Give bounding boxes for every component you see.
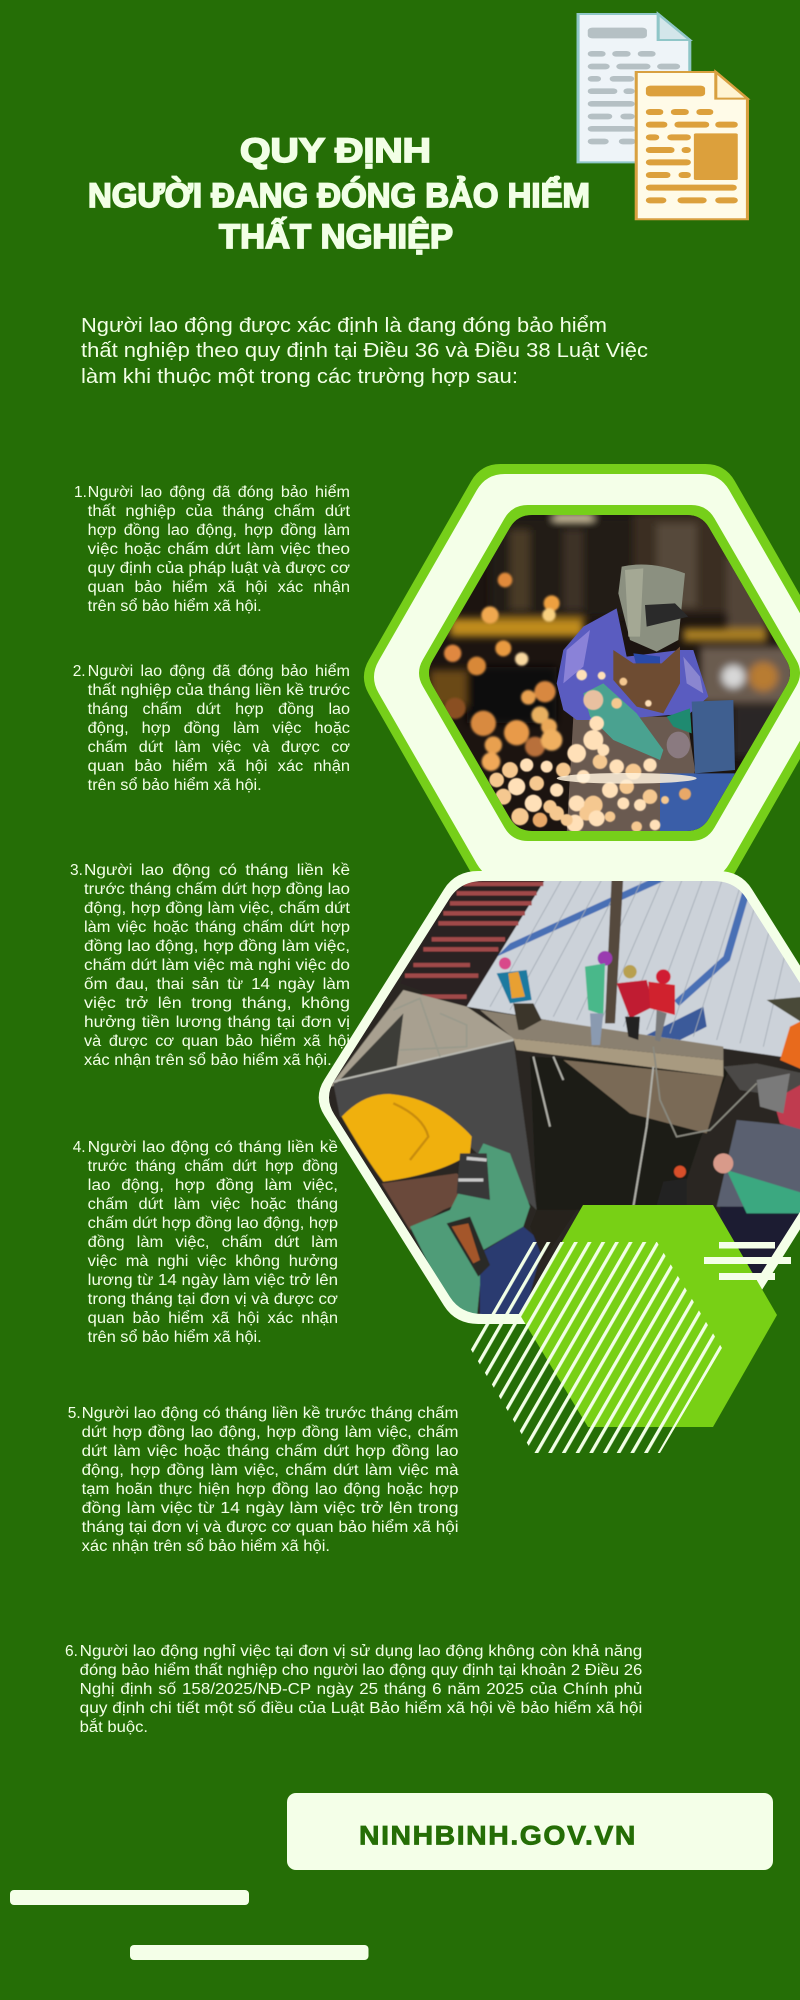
- list item 3: việc trở lên trong tháng, không: [84, 995, 350, 1012]
- intro paragraph: làm khi thuộc một trong các trường hợp sau:: [81, 365, 518, 388]
- icon: orange document: [636, 72, 747, 219]
- list item 2: Người lao động đã đóng bảo hiểm: [88, 663, 350, 680]
- title: QUY ĐỊNH: [240, 132, 431, 170]
- list item 5: động, hợp đồng làm việc, chấm dứt làm việc mà: [82, 1462, 459, 1479]
- list item 4: việc mà nghi việc không hưởng: [88, 1253, 338, 1270]
- hexagon outer lime ring: [364, 464, 800, 890]
- list item 5: tạm hoãn thực hiện hợp đồng lao động hoặc hợp: [82, 1481, 458, 1498]
- photo: welder with sparks: [417, 513, 800, 833]
- list item 1: trên sổ bảo hiểm xã hội.: [88, 598, 262, 615]
- list item 2: 2.: [73, 663, 86, 680]
- list item 5: dứt hợp đồng lao động, hợp đồng làm việc, chấm: [82, 1424, 458, 1441]
- list item 2: tháng chấm dứt hợp đồng lao: [88, 701, 350, 718]
- list item 4: Người lao động có tháng liền kề: [88, 1139, 338, 1156]
- list item 1: việc hoặc chấm dứt làm việc theo: [88, 541, 350, 558]
- list item 6: quy định chi tiết một số điều của Luật Bảo hiểm xã hội về bảo hiểm xã hội: [80, 1700, 642, 1717]
- list item 3: xác nhận trên sổ bảo hiểm xã hội.: [84, 1052, 332, 1069]
- list item 3: Người lao động có tháng liền kề: [84, 862, 350, 879]
- photo: construction workers at a pit: [310, 873, 800, 1320]
- decorative striped hexagon: [470, 1242, 722, 1453]
- icon: overlapping documents: [578, 14, 747, 219]
- list item 5: Người lao động có tháng liền kề trước tháng chấm: [82, 1405, 458, 1422]
- list item 2: trên sổ bảo hiểm xã hội.: [88, 777, 262, 794]
- list item 1: 1.: [74, 484, 87, 501]
- title: [88, 132, 590, 256]
- icon: blue document: [578, 14, 690, 162]
- list item 4: chấm dứt làm việc hoặc tháng: [88, 1196, 338, 1213]
- list item 2: quan bảo hiểm xã hội xác nhận: [88, 758, 350, 775]
- list item 3: hưởng tiền lương tháng tại đơn vị: [84, 1014, 350, 1031]
- list item 3: làm việc hoặc tháng chấm dứt hợp: [84, 919, 350, 936]
- list item 3: trước tháng chấm dứt hợp đồng lao: [84, 881, 350, 898]
- list item 4: chấm dứt hợp đồng lao động, hợp: [88, 1215, 338, 1232]
- list item 6: [65, 1643, 642, 1736]
- intro paragraph: thất nghiệp theo quy định tại Điều 36 và Điều 38 Luật Việc: [81, 339, 648, 362]
- list item 4: trên sổ bảo hiểm xã hội.: [88, 1329, 262, 1346]
- list item 6: Người lao động nghỉ việc tại đơn vị sử dụng lao động không còn khả năng: [80, 1643, 642, 1660]
- list item 5: tháng tại đơn vị và được cơ quan bảo hiểm xã hội: [82, 1519, 459, 1536]
- list item 5: [68, 1405, 459, 1555]
- list item 3: động, hợp đồng làm việc, chấm dứt: [84, 900, 351, 917]
- list item 6: bắt buộc.: [80, 1719, 148, 1736]
- hexagon inner lime ring: [419, 505, 800, 841]
- list item 3: chấm dứt làm việc mà nghi việc do: [84, 957, 350, 974]
- list item 4: 4.: [73, 1139, 86, 1156]
- hexagon cream border: [319, 871, 800, 1324]
- list item 5: 5.: [68, 1405, 81, 1422]
- title: NGƯỜI ĐANG ĐÓNG BẢO HIỂM: [88, 177, 590, 215]
- list item 4: lương từ 14 ngày làm việc trở lên: [88, 1272, 338, 1289]
- list item 6: đóng bảo hiểm thất nghiệp cho người lao động quy định tại khoản 2 Điều 26: [80, 1662, 642, 1679]
- list item 1: Người lao động đã đóng bảo hiểm: [88, 484, 350, 501]
- list item 4: trong tháng tại đơn vị và được cơ: [88, 1291, 338, 1308]
- hexagon frame with construction photo: [310, 871, 800, 1324]
- list item 4: [73, 1139, 338, 1346]
- list item 5: xác nhận trên sổ bảo hiểm xã hội.: [82, 1538, 330, 1555]
- list item 4: quan bảo hiểm xã hội xác nhận: [88, 1310, 338, 1327]
- decorative lime hexagon: [520, 1205, 777, 1427]
- list item 2: chấm dứt làm việc và được cơ: [88, 739, 350, 756]
- footer bar left: [10, 1890, 249, 1905]
- list item 2: động, hợp đồng làm việc hoặc: [88, 720, 350, 737]
- list item 6: 6.: [65, 1643, 78, 1660]
- list item 3: và được cơ quan bảo hiểm xã hội: [84, 1033, 350, 1050]
- hexagon frame with welder photo: [364, 464, 800, 890]
- list item 3: [70, 862, 351, 1069]
- decorative three white bars: [704, 1242, 791, 1280]
- website badge: [287, 1793, 773, 1870]
- list item 2: thất nghiệp của tháng liền kề trước: [88, 682, 350, 699]
- list item 3: 3.: [70, 862, 83, 879]
- list item 1: [74, 484, 351, 615]
- list item 5: dứt làm việc hoặc tháng chấm dứt hợp đồng lao: [82, 1443, 458, 1460]
- list item 4: trước tháng chấm dứt hợp đồng: [88, 1158, 338, 1175]
- list item 3: ốm đau, thai sản từ 14 ngày làm: [84, 976, 350, 993]
- website badge: NINHBINH.GOV.VN: [359, 1820, 637, 1850]
- list item 4: lao động, hợp đồng làm việc,: [88, 1177, 338, 1194]
- list item 3: đồng lao động, hợp đồng làm việc,: [84, 938, 350, 955]
- list item 1: thất nghiệp của tháng chấm dứt: [88, 503, 351, 520]
- list item 6: Nghị định số 158/2025/NĐ-CP ngày 25 tháng 6 năm 2025 của Chính phủ: [80, 1681, 642, 1698]
- list item 1: hợp đồng lao động, hợp đồng làm: [88, 522, 350, 539]
- intro paragraph: Người lao động được xác định là đang đóng bảo hiểm: [81, 314, 607, 337]
- footer bar right: [130, 1945, 368, 1960]
- list item 2: [73, 663, 350, 794]
- title: THẤT NGHIỆP: [219, 218, 453, 256]
- list item 1: quan bảo hiểm xã hội xác nhận: [88, 579, 350, 596]
- list item 5: đồng làm việc từ 14 ngày làm việc trở lên trong: [82, 1500, 458, 1517]
- list item 4: đồng làm việc, chấm dứt làm: [88, 1234, 338, 1251]
- intro paragraph: [81, 314, 648, 388]
- list item 1: quy định của pháp luật và được cơ: [88, 560, 350, 577]
- hexagon cream band: [374, 474, 800, 880]
